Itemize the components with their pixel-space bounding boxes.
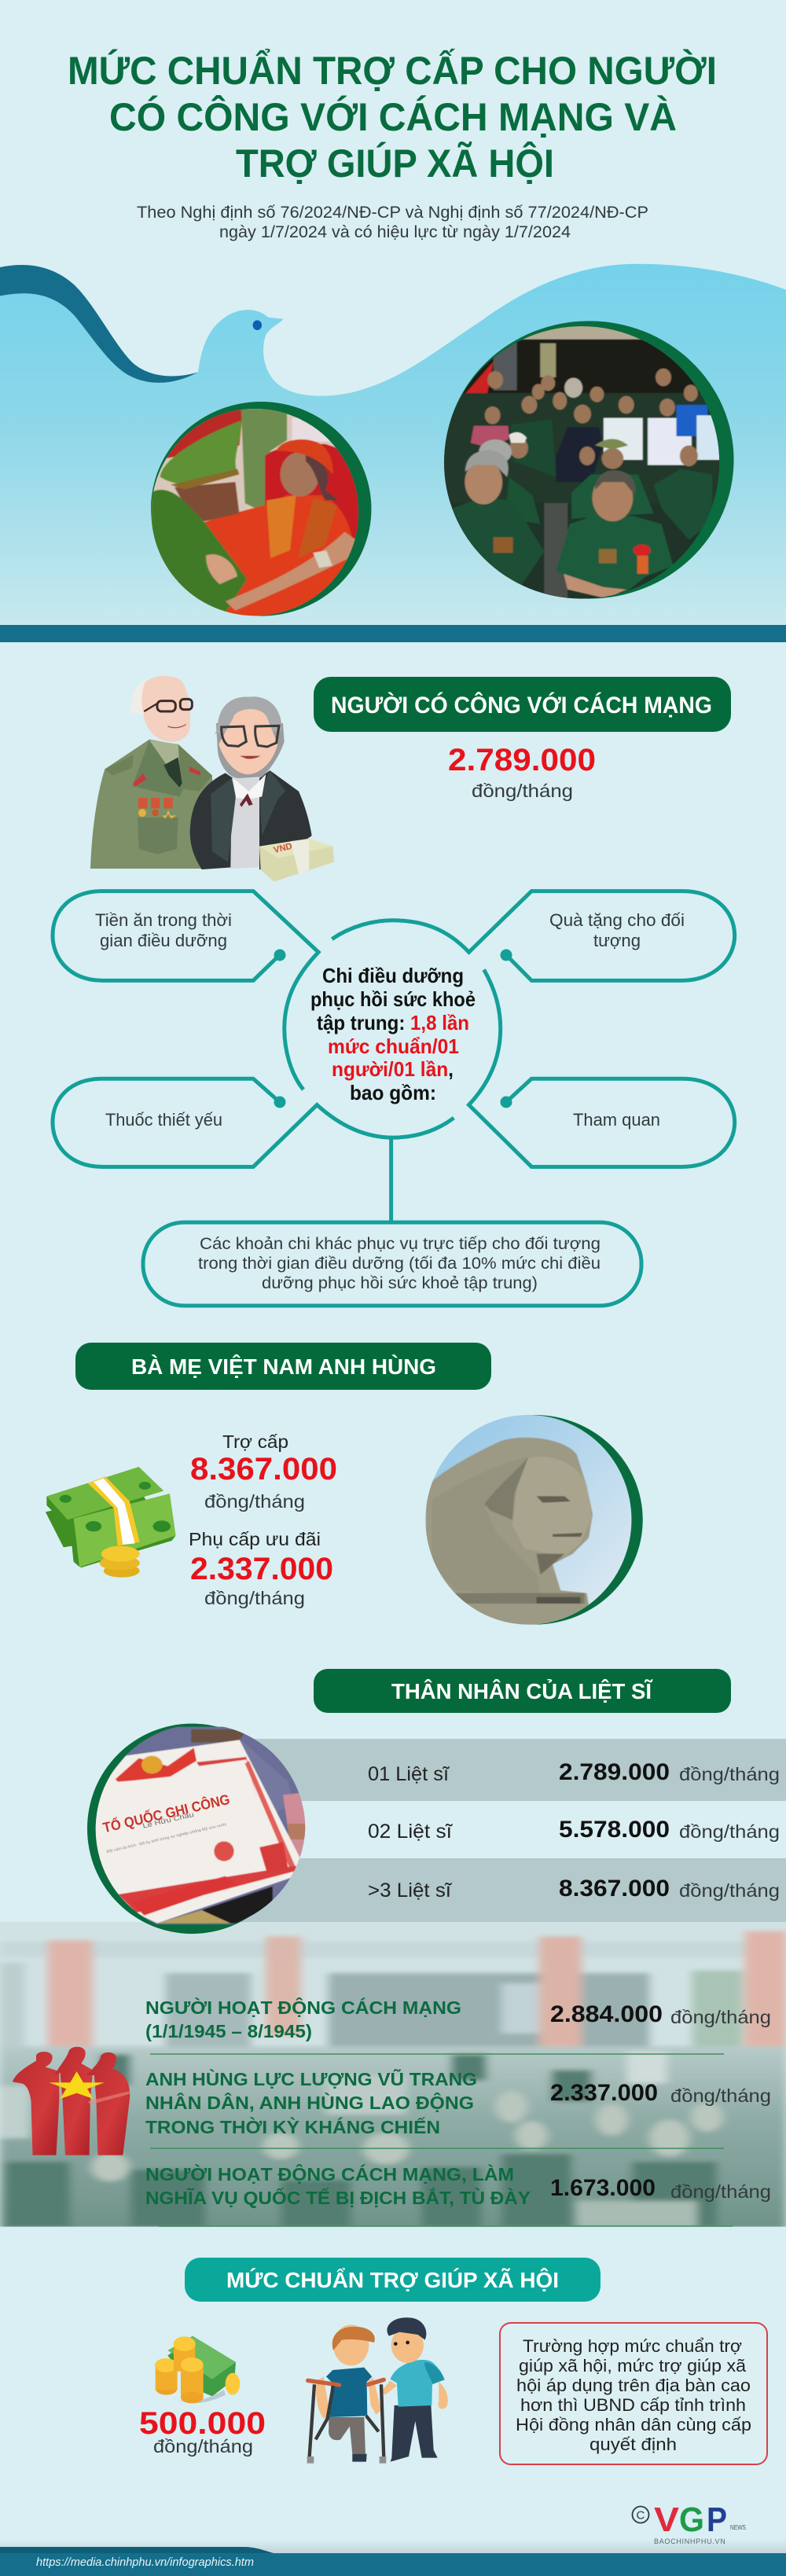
subtitle: ngày 1/7/2024 và có hiệu lực từ ngày 1/7/2024 bbox=[219, 223, 571, 241]
box: other expenses: dưỡng phục hồi sức khoẻ tập trung) bbox=[262, 1274, 538, 1292]
title: CÓ CÔNG VỚI CÁCH MẠNG VÀ bbox=[109, 94, 677, 139]
heading pill: than nhan cua liet si: THÂN NHÂN CỦA LIỆT SĨ bbox=[391, 1678, 653, 1703]
box: meals bbox=[95, 910, 232, 950]
table: martyr families bbox=[236, 1739, 786, 1922]
row: heroes: NHÂN DÂN, ANH HÙNG LAO ĐỘNG bbox=[145, 2092, 474, 2113]
box: sightseeing: Tham quan bbox=[573, 1110, 660, 1130]
row: heroes bbox=[145, 2068, 771, 2137]
row: international duty detainees: NGHĨA VỤ QUỐC TẾ BỊ ĐỊCH BẮT, TÙ ĐÀY bbox=[145, 2187, 531, 2208]
logo: VGP bbox=[632, 2501, 746, 2545]
callout: local standard note bbox=[500, 2323, 767, 2464]
center text: bao gồm: bbox=[350, 1081, 436, 1104]
photo: To quoc ghi cong certificate: Lê Hữu Châu bbox=[141, 1810, 195, 1830]
logo: VGP: G bbox=[679, 2501, 704, 2539]
row: heroes: TRONG THỜI KỲ KHÁNG CHIẾN bbox=[145, 2116, 440, 2137]
box: gifts bbox=[549, 910, 685, 950]
amounts: mothers: đồng/tháng bbox=[204, 1588, 305, 1608]
box: gifts: Quà tặng cho đối bbox=[549, 910, 685, 930]
amounts: mothers: đồng/tháng bbox=[204, 1491, 305, 1512]
row: 02: 02 Liệt sĩ bbox=[368, 1821, 453, 1843]
box: meals: gian điều dưỡng bbox=[100, 931, 227, 950]
logo: VGP: P bbox=[707, 2501, 727, 2539]
faded photo background: veterans group bbox=[0, 1922, 786, 2230]
row: revolutionary activists: (1/1/1945 – 8/1945) bbox=[145, 2021, 312, 2041]
row: revolutionary activists bbox=[145, 1997, 771, 2041]
row: >3: đồng/tháng bbox=[679, 1880, 780, 1901]
heading pill: than nhan cua liet si bbox=[314, 1669, 731, 1713]
subtitle: Theo Nghị định số 76/2024/NĐ-CP và Nghị định số 77/2024/NĐ-CP bbox=[137, 204, 648, 222]
center text: tập trung: 1,8 lần bbox=[317, 1011, 469, 1034]
amounts: mothers: Phụ cấp ưu đãi bbox=[189, 1529, 321, 1549]
heading pill: muc chuan tro giup xa hoi: MỨC CHUẨN TRỢ GIÚP XÃ HỘI bbox=[226, 2267, 559, 2292]
center text: phục hồi sức khoẻ bbox=[310, 987, 476, 1011]
row: >3: 8.367.000 bbox=[559, 1876, 670, 1902]
row: revolutionary activists: đồng/tháng bbox=[670, 2007, 771, 2027]
amount: 2.789.000: 2.789.000 bbox=[448, 743, 596, 777]
amount: 2.789.000: đồng/tháng bbox=[472, 781, 573, 801]
heading pill: ba me viet nam anh hung: BÀ MẸ VIỆT NAM ANH HÙNG bbox=[131, 1354, 436, 1379]
illustration: veteran couple with money bbox=[90, 676, 334, 882]
amount: 500.000: 500.000 bbox=[139, 2406, 266, 2441]
section divider band bbox=[0, 625, 786, 642]
center text: Chi điều dưỡng bbox=[322, 964, 464, 987]
heading pill: muc chuan tro giup xa hoi bbox=[185, 2258, 601, 2302]
connector outlines bbox=[53, 891, 735, 1222]
illustration: helper with person on crutches bbox=[307, 2317, 448, 2464]
logo: VGP: NEWS bbox=[730, 2524, 746, 2531]
amount: 500.000: đồng/tháng bbox=[153, 2436, 253, 2457]
row: revolutionary activists: NGƯỜI HOẠT ĐỘNG CÁCH MẠNG bbox=[145, 1997, 461, 2018]
footer band bbox=[0, 2547, 786, 2576]
diagram: convalescence cost breakdown bbox=[53, 891, 735, 1306]
box: other expenses: Các khoản chi khác phục vụ trực tiếp cho đối tượng bbox=[200, 1235, 601, 1253]
row: 01: 2.789.000 bbox=[559, 1759, 670, 1785]
center text bbox=[310, 964, 476, 1104]
box: gifts: tượng bbox=[593, 931, 641, 950]
callout: local standard note: quyết định bbox=[590, 2435, 677, 2454]
logo: VGP: C bbox=[637, 2509, 645, 2522]
icon: saluting soldiers silhouette bbox=[13, 2047, 130, 2155]
heading pill: nguoi co cong bbox=[314, 677, 731, 732]
subtitle bbox=[137, 204, 648, 241]
row: international duty detainees: NGƯỜI HOẠT ĐỘNG CÁCH MẠNG, LÀM bbox=[145, 2163, 514, 2185]
photo: To quoc ghi cong certificate: Đội viên du kích · Đã hy sinh trong sự nghiệp chống Mỹ cứu nước bbox=[106, 1822, 228, 1854]
row: 01: 01 Liệt sĩ bbox=[368, 1763, 450, 1785]
center text: người/01 lần, bbox=[332, 1057, 454, 1081]
callout: local standard note: giúp xã hội, mức trợ giúp xã bbox=[519, 2356, 747, 2376]
list: other beneficiaries bbox=[145, 1997, 771, 2208]
logo: VGP: V bbox=[654, 2501, 680, 2539]
box: other expenses: trong thời gian điều dưỡng (tối đa 10% mức chi điều bbox=[198, 1255, 601, 1273]
footer band: https://media.chinhphu.vn/infographics.htm bbox=[36, 2556, 254, 2569]
box: other expenses bbox=[143, 1222, 641, 1306]
amounts: mothers: Trợ cấp bbox=[222, 1431, 288, 1452]
amount: 2.789.000 bbox=[448, 743, 596, 801]
photo: group of veterans bbox=[439, 321, 736, 603]
illustration: veteran couple with money: VND bbox=[273, 842, 293, 855]
amounts: mothers bbox=[189, 1431, 337, 1608]
callout: local standard note: Trường hợp mức chuẩn trợ bbox=[523, 2336, 742, 2356]
row: heroes: ANH HÙNG LỰC LƯỢNG VŨ TRANG bbox=[145, 2068, 477, 2089]
row: 01: đồng/tháng bbox=[679, 1764, 780, 1784]
row: >3 bbox=[368, 1876, 780, 1902]
amounts: mothers: 8.367.000 bbox=[190, 1452, 337, 1486]
callout: local standard note: Hội đồng nhân dân cùng cấp bbox=[516, 2415, 751, 2435]
box: medicine: Thuốc thiết yếu bbox=[105, 1110, 222, 1130]
row: heroes: đồng/tháng bbox=[670, 2085, 771, 2106]
row: >3: >3 Liệt sĩ bbox=[368, 1880, 452, 1902]
title: TRỢ GIÚP XÃ HỘI bbox=[236, 141, 554, 186]
row: revolutionary activists: 2.884.000 bbox=[550, 2001, 663, 2027]
amounts: mothers: 2.337.000 bbox=[190, 1552, 333, 1586]
photo: To quoc ghi cong certificate bbox=[87, 1724, 309, 1934]
photo: officer with elderly woman bbox=[141, 402, 376, 619]
footer shadow bbox=[0, 2539, 786, 2553]
heading pill: nguoi co cong: NGƯỜI CÓ CÔNG VỚI CÁCH MẠNG bbox=[331, 692, 712, 718]
title: MỨC CHUẨN TRỢ CẤP CHO NGƯỜI bbox=[68, 49, 717, 93]
callout: local standard note: hơn thì UBND cấp tỉnh trình bbox=[520, 2395, 746, 2415]
amount: 500.000 bbox=[139, 2406, 266, 2457]
row: 02: đồng/tháng bbox=[679, 1821, 780, 1842]
callout: local standard note: hội áp dụng trên địa bàn cao bbox=[516, 2376, 751, 2395]
icon: banknotes and coins bbox=[46, 1467, 176, 1578]
photo: To quoc ghi cong certificate: TỔ QUỐC GHI CÔNG bbox=[101, 1791, 231, 1836]
row: 02 bbox=[368, 1817, 780, 1843]
row: 01 bbox=[368, 1759, 780, 1785]
box: meals: Tiền ăn trong thời bbox=[95, 910, 232, 930]
wave with dove bbox=[0, 264, 786, 627]
photo: monument statue bbox=[424, 1413, 643, 1627]
logo: VGP: BAOCHINHPHU.VN bbox=[654, 2537, 726, 2545]
icon: coins and money bbox=[155, 2336, 240, 2403]
row: international duty detainees: đồng/tháng bbox=[670, 2181, 771, 2202]
center text: mức chuẩn/01 bbox=[328, 1034, 459, 1058]
row: 02: 5.578.000 bbox=[559, 1817, 670, 1843]
title bbox=[68, 49, 717, 186]
row: international duty detainees bbox=[145, 2163, 771, 2208]
row: international duty detainees: 1.673.000 bbox=[550, 2175, 656, 2201]
row: heroes: 2.337.000 bbox=[550, 2080, 658, 2106]
heading pill: ba me viet nam anh hung bbox=[75, 1343, 491, 1390]
